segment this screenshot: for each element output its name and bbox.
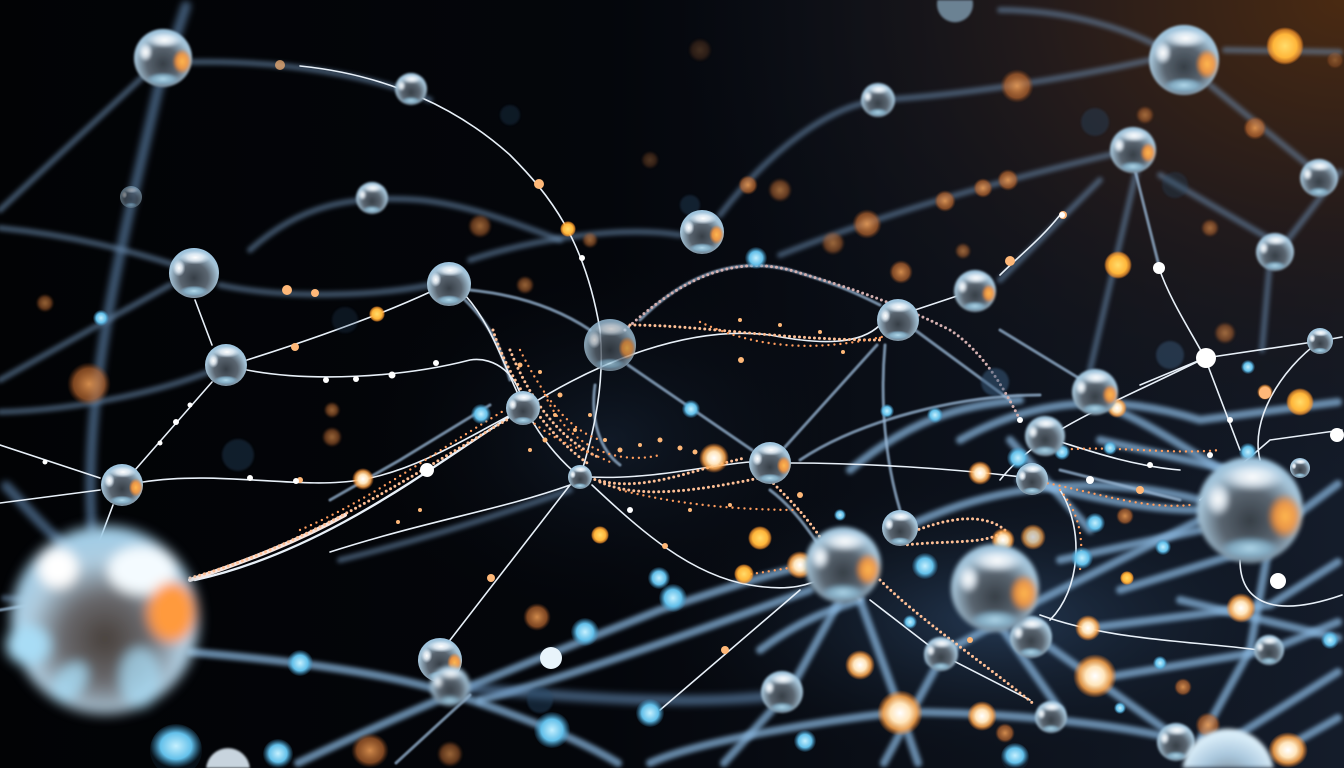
large foreground sphere, right xyxy=(1197,457,1303,563)
large blurred spheres, centre right xyxy=(430,527,1039,706)
sharp chrome sphere nodes xyxy=(101,186,1333,748)
large foreground sphere, bottom right xyxy=(1182,729,1274,768)
blue glowing nodes xyxy=(93,247,1339,768)
small beads and scattered sparks xyxy=(42,60,1344,654)
orange particle trails xyxy=(190,266,1220,705)
large foreground sphere, lower left xyxy=(6,526,199,714)
mid-weight connections xyxy=(0,170,1180,763)
